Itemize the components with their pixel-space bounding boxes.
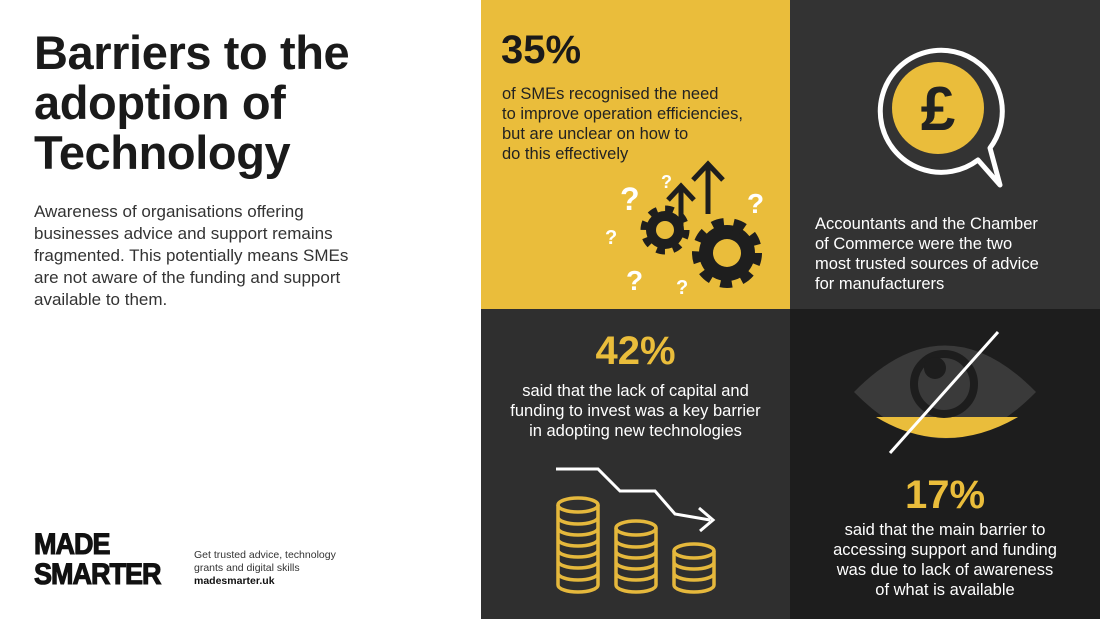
- title: adoption of: [34, 76, 285, 129]
- panel: 42%: [481, 309, 790, 619]
- icon: crossed-out eye: [854, 331, 1036, 454]
- text: of Commerce were the two: [815, 235, 1012, 253]
- icon: pound speech bubble: [878, 48, 1005, 188]
- text: funding to invest was a key barrier: [510, 402, 761, 420]
- text: [833, 521, 1057, 599]
- text: in adopting new technologies: [529, 422, 742, 440]
- icon: gears and arrows: ?: [661, 172, 672, 192]
- text: was due to lack of awareness: [837, 561, 1053, 579]
- text: [815, 215, 1039, 293]
- text: to improve operation efficiencies,: [502, 105, 743, 123]
- logo: [34, 528, 162, 590]
- text: [502, 85, 743, 163]
- text: Accountants and the Chamber: [815, 215, 1038, 233]
- tagline: grants and digital skills: [194, 562, 300, 574]
- stat 42%: 42%: [595, 329, 676, 373]
- icon: gears and arrows: ?: [620, 181, 640, 217]
- icon: gears and arrows: ?: [676, 277, 688, 299]
- text: of SMEs recognised the need: [502, 85, 718, 103]
- icon: pound speech bubble: £: [921, 75, 955, 144]
- text: accessing support and funding: [833, 541, 1057, 559]
- text: said that the lack of capital and: [522, 382, 749, 400]
- icon: gears and arrows: ?: [605, 227, 617, 249]
- text: but are unclear on how to: [502, 125, 688, 143]
- tagline: Get trusted advice, technology: [194, 549, 336, 561]
- logo: SMARTER: [34, 558, 160, 590]
- panel: 35%: [481, 0, 790, 309]
- text: do this effectively: [502, 145, 628, 163]
- text: for manufacturers: [815, 275, 944, 293]
- intro text: Awareness of organisations offering businesses advice and support remains fragmented. This potentially means SMEs are not aware of the funding and support available to them.: [34, 202, 348, 309]
- stat 17%: 17%: [905, 473, 985, 517]
- icon: gears and arrows: [605, 160, 764, 299]
- text: most trusted sources of advice: [815, 255, 1039, 273]
- stat 35%: 35%: [501, 28, 581, 72]
- title: [34, 26, 349, 179]
- logo: MADE: [34, 528, 110, 561]
- panel: 17%: [790, 309, 1100, 619]
- panel: trusted sources: [790, 0, 1100, 309]
- text: of what is available: [875, 581, 1015, 599]
- text: [510, 382, 761, 440]
- icon: gears and arrows: ?: [747, 188, 764, 219]
- icon: gears and arrows: ?: [626, 265, 643, 296]
- title: Technology: [34, 126, 290, 179]
- tagline: madesmarter.uk: [194, 575, 275, 587]
- tagline: [194, 549, 336, 587]
- title: Barriers to the: [34, 26, 349, 79]
- text: said that the main barrier to: [845, 521, 1045, 539]
- icon: coins with falling arrow: [556, 468, 716, 594]
